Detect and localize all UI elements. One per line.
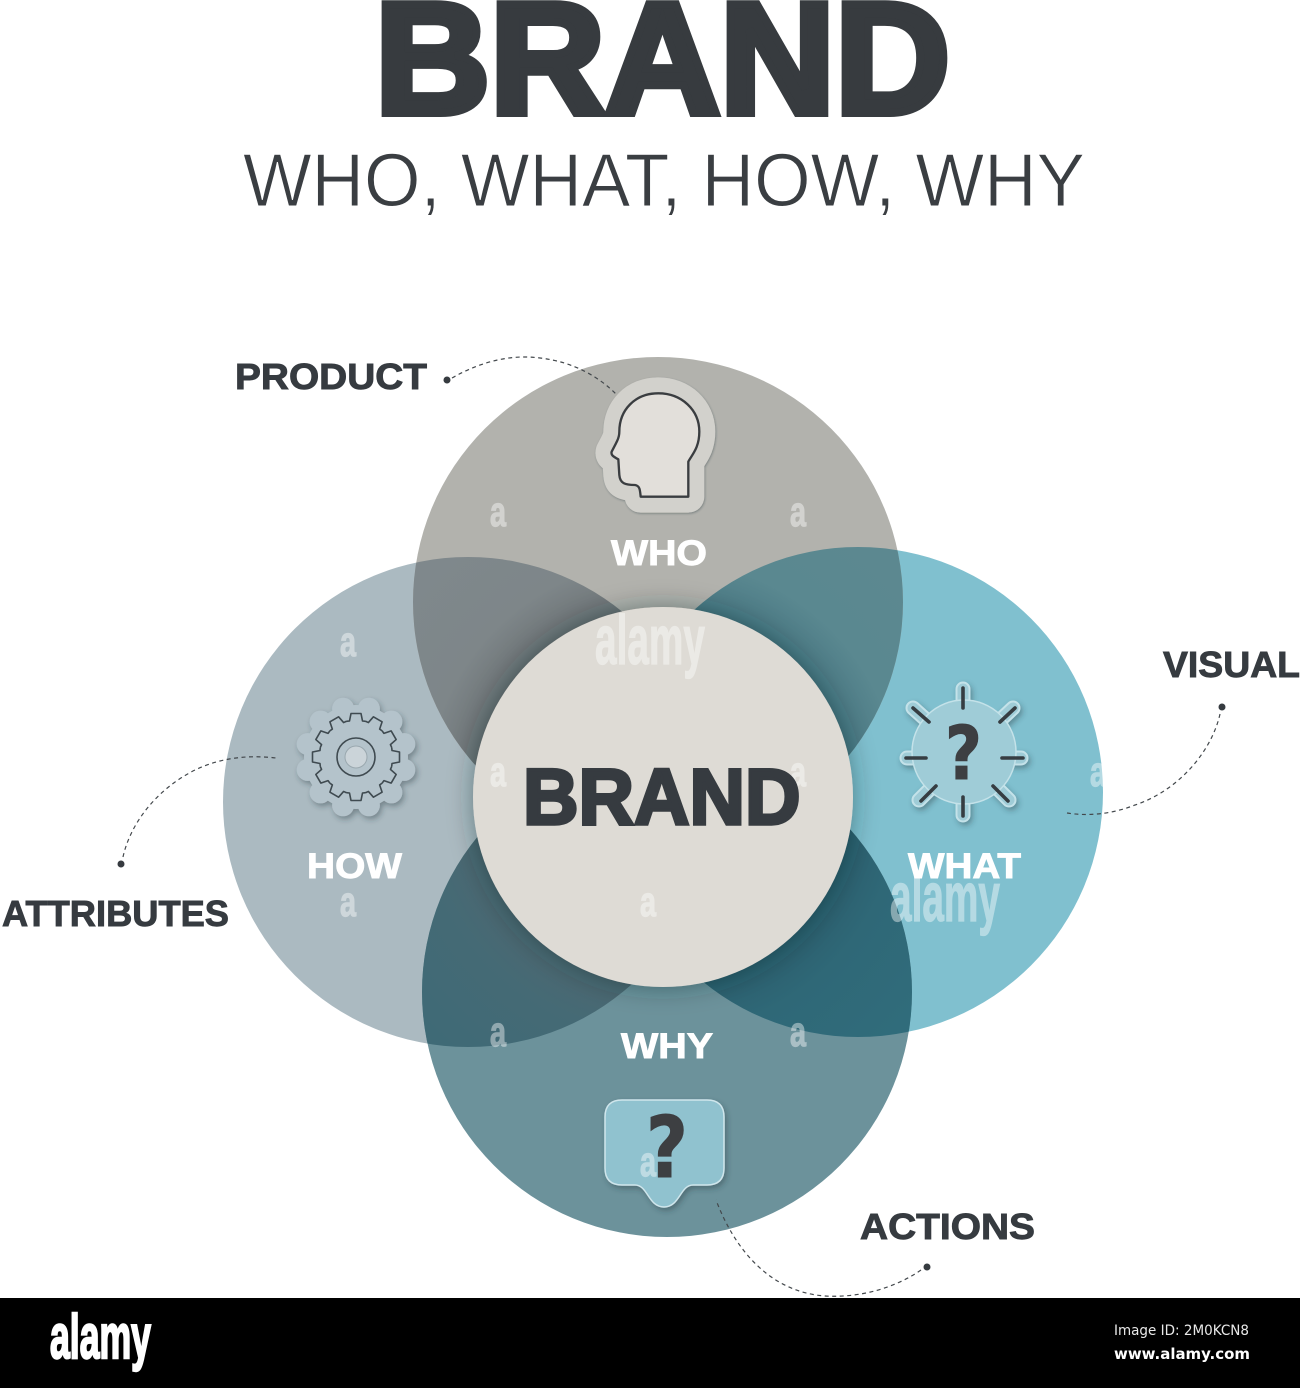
callout: attributes [2,757,276,934]
watermarks: a [790,1008,806,1055]
overlap: who and how [413,557,622,766]
overlap: who and what [694,547,903,756]
icon: gear [297,698,415,816]
watermarks: alamy [890,858,1000,936]
circle: what [613,547,1103,1037]
icon: head [611,393,699,497]
callout: product: PRODUCT [235,356,427,397]
icon: question sun [906,688,1023,816]
watermarks: a [490,1008,506,1055]
label: why: WHY [621,1027,713,1066]
footer bar [0,1298,1300,1388]
center label: brand: BRAND [523,752,800,841]
callout: visual [1067,644,1300,814]
icon: question speech bubble [605,1099,724,1207]
callout: actions [716,1200,1035,1296]
watermarks: a [790,748,806,795]
callout: visual: VISUAL [1163,644,1300,685]
callout: actions: ACTIONS [860,1206,1035,1247]
watermarks: alamy [595,601,705,679]
watermarks: a [1090,748,1106,795]
icon: question sun: ? [945,711,982,797]
footer logo: alamy [50,1303,151,1372]
circle: who [413,357,903,847]
callout: product [235,356,616,397]
watermarks: a [490,748,506,795]
watermarks: a [340,878,356,925]
footer url: www.alamy.com [1114,1345,1250,1363]
circle: how [223,557,713,1047]
watermarks [340,488,1106,1055]
icon: question speech bubble: a [640,1138,656,1185]
callout: attributes: ATTRIBUTES [2,893,229,934]
overlap: how and why [422,837,632,1047]
watermarks: a [640,878,656,925]
footer image id: Image ID: 2M0KCN8 [1114,1323,1249,1339]
venn diagram [223,357,1103,1237]
watermarks: a [340,618,356,665]
watermarks: a [790,488,806,535]
overlap: what and why [704,830,912,1037]
icon: question speech bubble: ? [646,1099,688,1198]
center circle [473,607,853,987]
watermarks: a [490,488,506,535]
label: how: HOW [307,847,402,886]
subtitle: WHO, WHAT, HOW, WHY [243,138,1085,222]
label: who: WHO [611,534,707,573]
circle: why [422,747,912,1237]
label: what: WHAT [908,847,1021,886]
